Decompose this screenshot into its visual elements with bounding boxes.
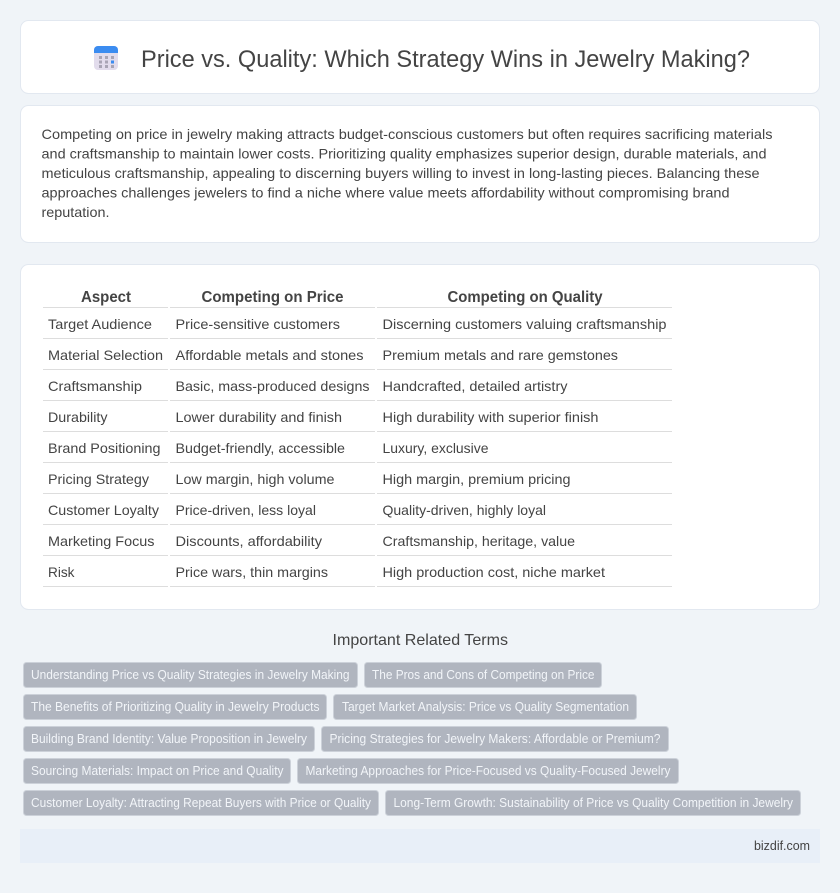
chip (322, 726, 668, 752)
row: risk: Risk (48, 564, 75, 580)
intro text: approaches challenges jewelers to find a niche where value meets affordability without compromising brand (42, 184, 730, 200)
row: risk: Price wars, thin margins (176, 564, 328, 580)
row: customer loyalty: Quality-driven, highly loyal (382, 502, 546, 518)
chip (24, 726, 314, 752)
row: marketing focus: Craftsmanship, heritage, value (382, 533, 575, 549)
row: brand positioning: Luxury, exclusive (382, 440, 489, 456)
table header (81, 289, 603, 306)
panel: intro paragraph (20, 106, 820, 242)
table header: Competing on Quality (448, 289, 603, 306)
row: durability: Durability (48, 409, 108, 425)
chip: Sourcing Materials: Impact on Price and Quality (31, 764, 284, 778)
row: target audience: Price-sensitive customers (176, 316, 340, 332)
row: brand positioning (48, 440, 489, 456)
row: durability: Lower durability and finish (176, 409, 342, 425)
row: material selection: Affordable metals and stones (176, 347, 364, 363)
panel: comparison table (20, 264, 820, 610)
chip (334, 694, 636, 720)
chip (298, 758, 678, 784)
heading: important related terms: Important Related Terms (332, 632, 508, 649)
row: craftsmanship: Basic, mass-produced designs (176, 378, 370, 394)
chip: Customer Loyalty: Attracting Repeat Buyers with Price or Quality (31, 796, 372, 810)
row: target audience: Target Audience (48, 316, 152, 332)
chip: Understanding Price vs Quality Strategies in Jewelry Making (31, 668, 350, 682)
chip: Target Market Analysis: Price vs Quality Segmentation (342, 700, 629, 714)
intro text: Competing on price in jewelry making attracts budget-conscious customers but often requires sacrificing materials (42, 126, 773, 142)
row: target audience: Discerning customers valuing craftsmanship (382, 316, 667, 332)
icon: calendar (94, 46, 118, 70)
chip: The Pros and Cons of Competing on Price (372, 668, 595, 682)
row: customer loyalty: Price-driven, less loyal (176, 502, 316, 518)
row: pricing strategy (48, 471, 570, 487)
related terms chips (24, 662, 800, 816)
chip (386, 790, 800, 816)
intro text: and craftsmanship to maintain lower costs. Prioritizing quality emphasizes superior design, durable materials, and (42, 146, 766, 162)
row: material selection: Material Selection (48, 347, 163, 363)
table header: Competing on Price (202, 289, 344, 306)
row: durability: High durability with superior finish (382, 409, 598, 425)
chip: Marketing Approaches for Price-Focused vs Quality-Focused Jewelry (306, 764, 671, 778)
row: craftsmanship: Craftsmanship (48, 378, 142, 394)
row: marketing focus: Marketing Focus (48, 533, 154, 549)
chip (24, 662, 358, 688)
chip: Building Brand Identity: Value Proposition in Jewelry (31, 732, 308, 746)
row: customer loyalty: Customer Loyalty (48, 502, 159, 518)
intro text (42, 126, 773, 220)
chip (24, 694, 326, 720)
row: risk: High production cost, niche market (382, 564, 605, 580)
intro text: meticulous craftsmanship, appealing to discerning buyers willing to invest in long-lasting pieces. Balancing these (42, 165, 760, 181)
row: pricing strategy: Pricing Strategy (48, 471, 149, 487)
intro text: reputation. (42, 204, 110, 220)
title: Price vs. Quality: Which Strategy Wins in Jewelry Making? (141, 46, 750, 73)
row: marketing focus (48, 533, 575, 549)
chip: Pricing Strategies for Jewelry Makers: Affordable or Premium? (330, 732, 661, 746)
row: craftsmanship: Handcrafted, detailed artistry (382, 378, 568, 394)
row: material selection: Premium metals and rare gemstones (382, 347, 618, 363)
row: durability (48, 409, 598, 425)
row: pricing strategy: High margin, premium pricing (382, 471, 570, 487)
row: pricing strategy: Low margin, high volume (176, 471, 335, 487)
row: brand positioning: Budget-friendly, accessible (176, 440, 345, 456)
panel: header (20, 20, 820, 94)
row: customer loyalty (48, 502, 546, 518)
footer (20, 829, 820, 863)
chip (24, 758, 290, 784)
row: marketing focus: Discounts, affordability (176, 533, 322, 549)
row: brand positioning: Brand Positioning (48, 440, 160, 456)
chip (364, 662, 602, 688)
row: material selection (48, 347, 618, 363)
row: risk (48, 564, 605, 580)
chip: Long-Term Growth: Sustainability of Price vs Quality Competition in Jewelry (394, 796, 794, 810)
row: target audience (48, 316, 667, 332)
chip (24, 790, 378, 816)
table header: Aspect (81, 289, 132, 306)
row: craftsmanship (48, 378, 568, 394)
chip: The Benefits of Prioritizing Quality in Jewelry Products (31, 700, 320, 714)
footer brand: bizdif.com (754, 838, 810, 853)
